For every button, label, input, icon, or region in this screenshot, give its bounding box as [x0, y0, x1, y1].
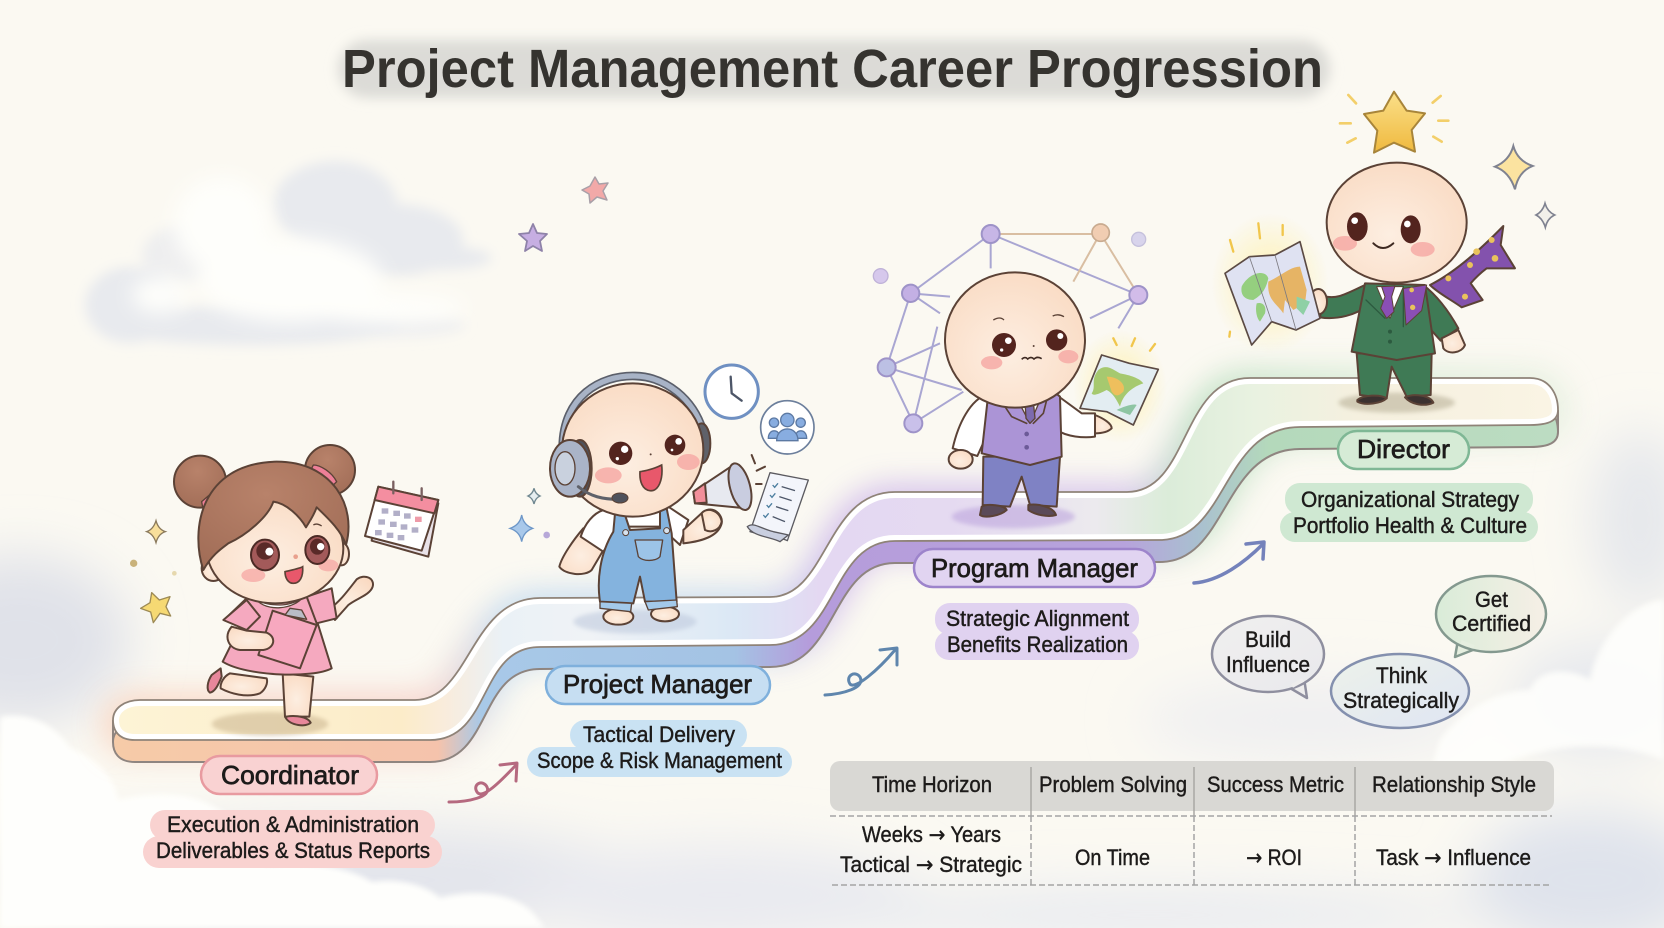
role label: director: Director	[1357, 434, 1450, 464]
table header: Problem Solving	[1039, 772, 1187, 797]
panel: project manager character	[510, 365, 814, 634]
table row: Task → Influence	[1376, 845, 1531, 871]
icon: calendar	[365, 482, 438, 557]
pm legs and shoes	[603, 607, 679, 625]
girl legs	[208, 668, 313, 725]
speech bubble: think strategically	[1331, 654, 1469, 728]
career staircase path	[113, 378, 1558, 762]
network	[873, 224, 1147, 432]
icon: purple star	[519, 224, 547, 251]
speech bubble: build influence: Influence	[1226, 652, 1310, 677]
duties: coordinator	[143, 810, 442, 868]
girl collar	[257, 597, 303, 608]
girl hair buns	[174, 445, 355, 508]
scarf dots	[1445, 237, 1498, 300]
scarf tails	[1430, 226, 1515, 307]
icon: checklist	[747, 473, 808, 542]
pm shirt	[581, 507, 688, 552]
pm left arm	[559, 528, 607, 574]
pm hand	[702, 510, 722, 531]
speech bubble: get certified: Get	[1475, 587, 1508, 612]
girl left arm	[228, 627, 273, 650]
duties: project manager: Tactical Delivery	[583, 722, 735, 747]
role label: coordinator: Coordinator	[221, 760, 359, 790]
girl head	[207, 493, 343, 603]
role label: program manager: Program Manager	[931, 553, 1138, 583]
girl hair	[198, 462, 349, 570]
pgm arms	[949, 393, 1112, 469]
director head	[1327, 163, 1467, 283]
top-left cloud	[85, 161, 492, 345]
pm overalls	[599, 508, 677, 612]
director face	[1333, 212, 1435, 257]
speech bubble: get certified	[1436, 576, 1546, 657]
duties: director: Portfolio Health & Culture	[1293, 513, 1527, 538]
table row: → ROI	[1246, 845, 1302, 871]
shadow	[1338, 393, 1455, 413]
duties: project manager	[527, 720, 792, 777]
icon: map	[1080, 338, 1158, 425]
girl ears	[202, 543, 349, 581]
duties: program manager: Benefits Realization	[947, 632, 1128, 657]
role label: director	[1338, 431, 1469, 469]
pgm head	[945, 272, 1085, 408]
panel: program manager character	[873, 224, 1167, 528]
girl clipboard	[258, 608, 317, 668]
icon: sparkles	[510, 488, 550, 542]
panel: director character	[1212, 92, 1555, 413]
shadow	[952, 505, 1075, 528]
panel: coordinator character	[130, 445, 438, 736]
icon: team	[761, 401, 814, 454]
pm headset cup and mic	[550, 440, 628, 503]
duties: director	[1280, 483, 1538, 542]
speech bubble: think strategically: Think	[1376, 663, 1428, 688]
pm headset ears	[563, 376, 710, 463]
pm face	[595, 435, 700, 491]
pgm face	[981, 315, 1078, 369]
pm head	[562, 383, 703, 517]
icon: sparkles	[1495, 146, 1555, 227]
speech bubble: get certified: Certified	[1452, 611, 1531, 636]
pgm legs	[980, 457, 1060, 517]
icon: pink star	[582, 177, 608, 203]
speech bubble: build influence	[1212, 616, 1324, 698]
map glow	[1212, 213, 1328, 353]
table header	[830, 761, 1554, 811]
pm right arm	[683, 509, 722, 543]
role label: project manager: Project Manager	[563, 669, 752, 699]
duties: director: Organizational Strategy	[1301, 487, 1519, 512]
duties: program manager: Strategic Alignment	[946, 606, 1129, 631]
duties: project manager: Scope & Risk Management	[537, 748, 782, 773]
icon: world map	[1225, 223, 1320, 345]
shadow	[573, 610, 697, 634]
comparison table	[830, 761, 1554, 885]
table row: Tactical → Strategic	[840, 852, 1022, 878]
girl dress	[223, 595, 332, 675]
speech bubble: build influence: Build	[1245, 627, 1291, 652]
map glow	[1073, 330, 1167, 443]
girl face	[241, 524, 338, 583]
table row: On Time	[1075, 845, 1150, 870]
icon: gold star	[1340, 92, 1448, 153]
director legs	[1357, 353, 1433, 405]
arrow: program manager to director	[1194, 542, 1264, 583]
title: Project Management Career Progression	[342, 39, 1323, 99]
duties: coordinator: Execution & Administration	[167, 812, 419, 837]
table header: Relationship Style	[1372, 772, 1536, 797]
icon: clock	[705, 365, 758, 418]
director arms	[1310, 285, 1465, 352]
role label: project manager	[546, 666, 770, 704]
table row: Weeks → Years	[862, 822, 1001, 848]
table header: Time Horizon	[872, 772, 992, 797]
white clouds	[0, 600, 1664, 928]
lower haze	[0, 430, 1664, 928]
icon: megaphone	[693, 455, 765, 512]
duties: program manager	[935, 603, 1139, 660]
table row	[840, 822, 1531, 878]
table header: Success Metric	[1207, 772, 1344, 797]
arrow: project manager to program manager	[825, 648, 897, 695]
arrow: coordinator to project manager	[449, 763, 517, 802]
girl right arm	[328, 577, 373, 620]
speech bubble: think strategically: Strategically	[1343, 688, 1459, 713]
shadow	[212, 712, 328, 736]
director suit	[1352, 283, 1435, 360]
role label: program manager	[914, 549, 1155, 587]
role label: coordinator	[201, 756, 377, 794]
pgm vest	[982, 388, 1062, 465]
duties: coordinator: Deliverables & Status Reports	[156, 838, 430, 863]
icon: sparkles and star	[130, 521, 177, 623]
